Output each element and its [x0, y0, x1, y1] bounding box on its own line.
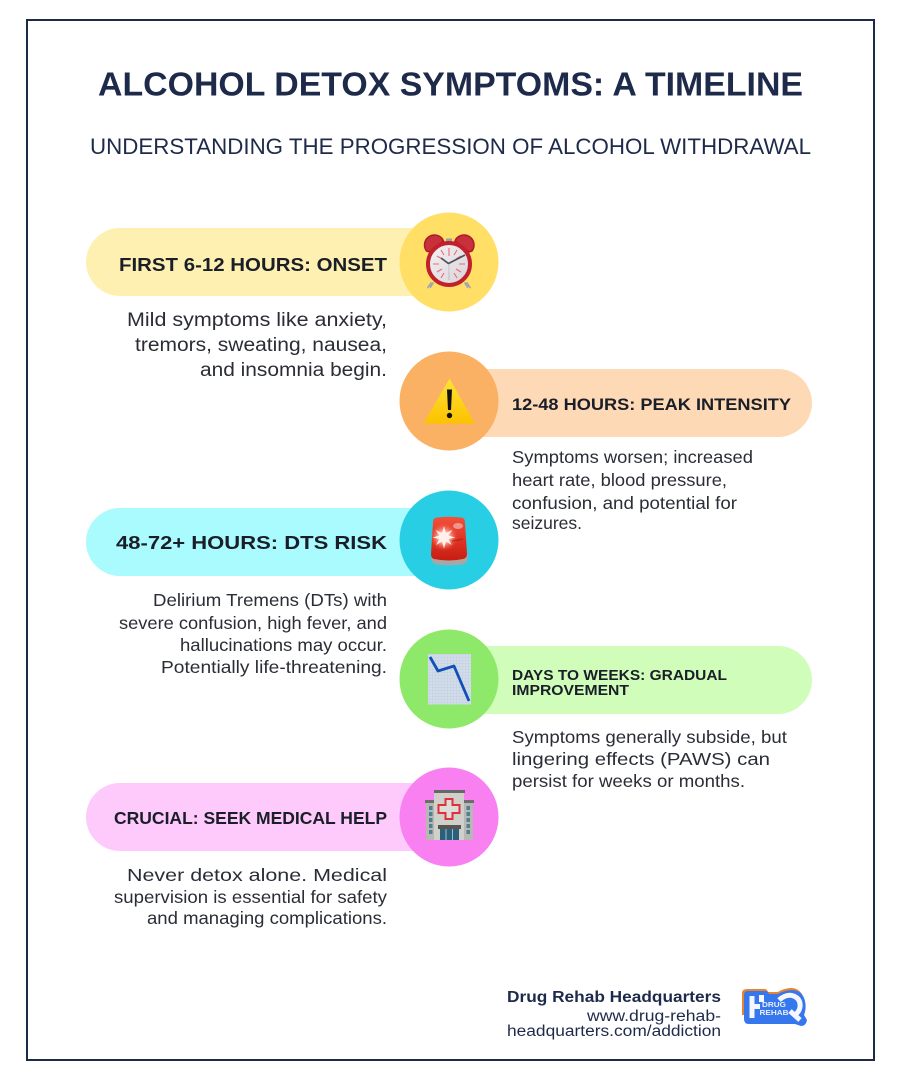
body text: peak intensity: heart rate, blood pressure, — [512, 470, 727, 490]
body text: DTs risk — [119, 590, 387, 677]
body text: onset: and insomnia begin. — [200, 360, 387, 381]
icon: siren — [400, 490, 498, 590]
panel: days to weeks — [400, 630, 812, 791]
icon: alarm clock — [400, 212, 498, 312]
heading: onset: FIRST 6-12 HOURS: ONSET — [119, 254, 388, 275]
body text: DTs risk: hallucinations may occur. — [180, 635, 387, 655]
body text: peak intensity — [512, 447, 753, 533]
website url: headquarters.com/addiction — [507, 1023, 721, 1040]
body text: peak intensity: confusion, and potential for — [512, 493, 737, 513]
icon: warning sign — [400, 352, 498, 450]
body text: DTs risk: severe confusion, high fever, and — [119, 613, 387, 633]
footer: organisation — [507, 988, 807, 1040]
website url — [507, 1008, 721, 1040]
body text: medical help: and managing complications. — [147, 908, 387, 928]
header pill: gradual improvement — [460, 646, 812, 714]
subtitle: UNDERSTANDING THE PROGRESSION OF ALCOHOL WITHDRAWAL — [90, 134, 811, 159]
logo: HQ: DRUG — [762, 1000, 786, 1009]
logo: HQ — [742, 988, 807, 1026]
header pill: onset — [86, 228, 440, 296]
body text: medical help — [114, 865, 387, 928]
body text: gradual improvement — [512, 727, 787, 791]
body text: medical help: Never detox alone. Medical — [127, 865, 387, 885]
body text: onset: tremors, sweating, nausea, — [135, 335, 387, 356]
body text: gradual improvement: lingering effects (PAWS) can — [512, 749, 770, 769]
body text: peak intensity: Symptoms worsen; increased — [512, 447, 753, 467]
heading: gradual improvement: DAYS TO WEEKS: GRADUAL — [512, 668, 727, 684]
header pill: peak intensity — [460, 369, 812, 437]
organisation name: Drug Rehab Headquarters — [507, 989, 721, 1006]
website url: www.drug-rehab- — [586, 1008, 721, 1025]
header pill: DTs risk — [86, 508, 440, 576]
body text: medical help: supervision is essential for safety — [114, 887, 387, 907]
body text: gradual improvement: persist for weeks or months. — [512, 771, 745, 791]
body text: onset — [127, 310, 387, 381]
title: ALCOHOL DETOX SYMPTOMS: A TIMELINE — [98, 66, 803, 104]
icon: chart decreasing — [400, 630, 498, 728]
panel: seek medical help — [86, 768, 498, 928]
panel: 12-48 hours — [400, 352, 812, 533]
icon: hospital — [400, 768, 498, 866]
heading: medical help: CRUCIAL: SEEK MEDICAL HELP — [114, 808, 387, 828]
heading: gradual improvement: IMPROVEMENT — [512, 683, 629, 699]
heading: peak intensity: 12-48 HOURS: PEAK INTENSITY — [512, 396, 791, 414]
panel: 48-72+ hours — [86, 490, 498, 677]
heading: gradual improvement — [512, 668, 727, 699]
body text: peak intensity: seizures. — [512, 513, 582, 533]
panel: first 6-12 hours — [86, 212, 499, 381]
header pill: medical help — [86, 783, 440, 851]
body text: DTs risk: Potentially life-threatening. — [161, 657, 387, 677]
heading: DTs risk: 48-72+ HOURS: DTS RISK — [116, 532, 388, 553]
body text: gradual improvement: Symptoms generally subside, but — [512, 727, 787, 747]
body text: DTs risk: Delirium Tremens (DTs) with — [153, 590, 387, 610]
body text: onset: Mild symptoms like anxiety, — [127, 310, 387, 331]
logo: HQ: REHAB — [760, 1008, 789, 1017]
